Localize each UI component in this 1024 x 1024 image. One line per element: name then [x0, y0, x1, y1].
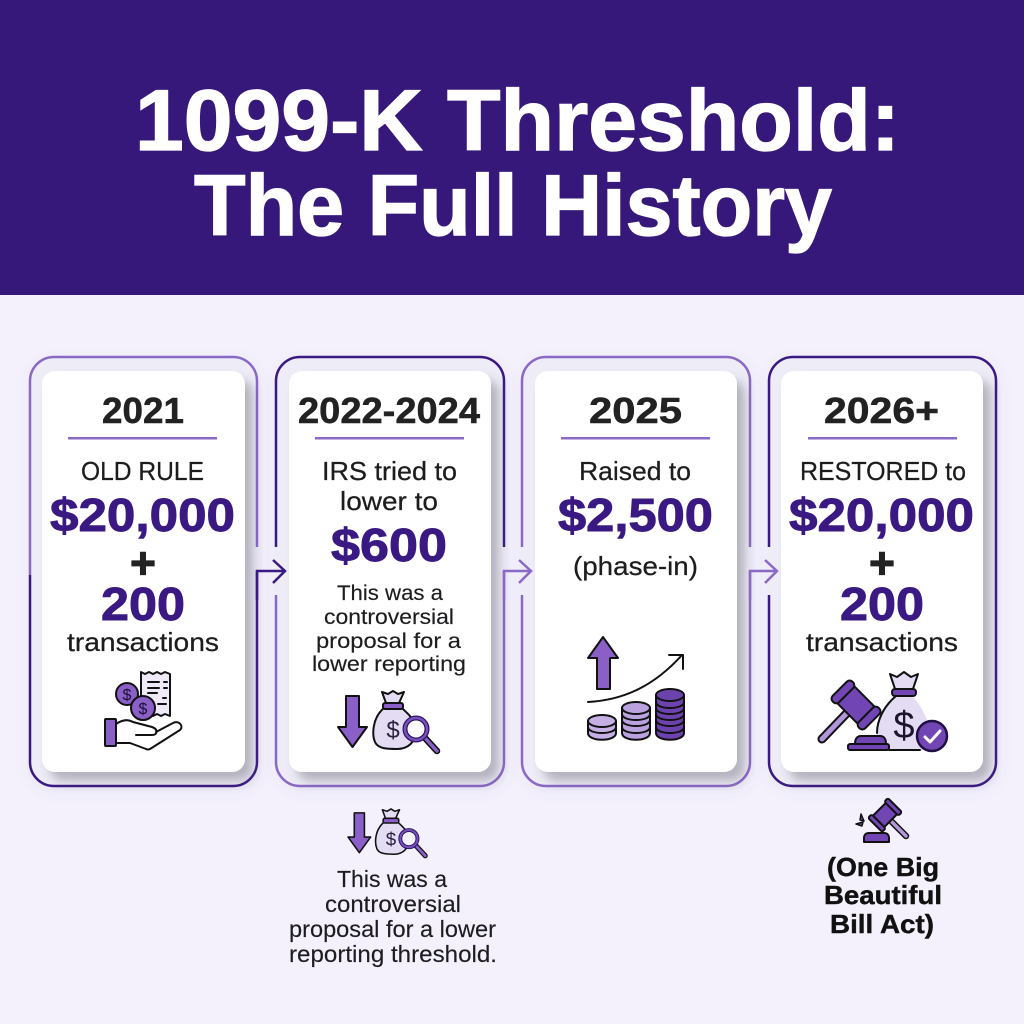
unit: transactions: [806, 627, 958, 657]
note: (phase-in): [573, 551, 698, 581]
panel: 2025: [522, 357, 750, 786]
card: [781, 371, 983, 772]
card: [289, 371, 491, 772]
card: [535, 371, 737, 772]
caption text: [289, 866, 497, 967]
icon: up arrow, growth curve, coin stacks: [588, 637, 684, 740]
header banner: [0, 0, 1024, 295]
plus: +: [130, 539, 156, 588]
unit: transactions: [67, 627, 219, 657]
note: controversial: [324, 606, 454, 629]
icon: small gavel: [856, 798, 906, 842]
caption text: proposal for a lower: [289, 916, 496, 942]
label: lower to: [340, 486, 438, 516]
icon: gavel and money bag with check: [822, 672, 947, 751]
caption text: Bill Act): [830, 909, 934, 939]
title: [135, 73, 900, 254]
arrow: 2025 to 2026: [750, 560, 777, 600]
arrow: 2021 to 2022: [257, 560, 285, 600]
label: Raised to: [579, 456, 691, 486]
amount: $20,000: [789, 489, 974, 541]
label: IRS tried to: [322, 456, 457, 486]
year: 2021: [102, 390, 184, 431]
year: 2022-2024: [298, 390, 480, 431]
icon: down arrow, money bag, magnifier: $: [386, 717, 400, 744]
caption text: controversial: [325, 891, 461, 917]
count: 200: [840, 578, 924, 630]
label: [322, 456, 457, 516]
title: The Full History: [194, 158, 832, 254]
caption: 2022-2024 below card: [289, 809, 497, 967]
icon: hand with coins and receipt: $: [139, 701, 148, 718]
background: [0, 295, 1024, 1024]
year: 2025: [589, 390, 682, 431]
frame: [29, 357, 257, 786]
caption text: Beautiful: [824, 880, 942, 910]
panel: 2022-2024: [276, 357, 504, 786]
arrow: 2022 to 2025: [504, 560, 531, 600]
panel: 2021: [29, 357, 257, 786]
caption text: [824, 852, 942, 939]
note: proposal for a: [316, 630, 461, 653]
frame: [522, 357, 750, 786]
caption: One Big Beautiful Bill Act: [824, 798, 942, 939]
count: 200: [101, 578, 185, 630]
frame: [768, 357, 996, 786]
label: RESTORED to: [800, 456, 966, 486]
note: This was a: [337, 582, 443, 605]
title: 1099-K Threshold:: [135, 73, 900, 169]
icon: gavel and money bag with check: $: [893, 705, 915, 747]
caption text: (One Big: [827, 852, 939, 882]
card: [42, 371, 245, 772]
caption text: This was a: [337, 866, 447, 892]
note: lower reporting: [312, 653, 466, 676]
frame: [276, 357, 504, 786]
plus: +: [869, 539, 895, 588]
note: [312, 582, 466, 676]
icon: down arrow, money bag, magnifier: [348, 809, 425, 856]
amount: $600: [331, 519, 447, 571]
amount: $20,000: [50, 489, 235, 541]
year: 2026+: [824, 390, 939, 431]
icon: down arrow, money bag, magnifier: $: [386, 829, 397, 850]
amount: $2,500: [558, 489, 713, 541]
panel: 2026+: [768, 357, 996, 786]
label: OLD RULE: [81, 456, 204, 486]
caption text: reporting threshold.: [289, 941, 497, 967]
icon: down arrow, money bag, magnifier: [338, 691, 437, 751]
icon: hand with coins and receipt: $: [123, 687, 132, 704]
icon: hand with coins and receipt: [105, 672, 181, 750]
